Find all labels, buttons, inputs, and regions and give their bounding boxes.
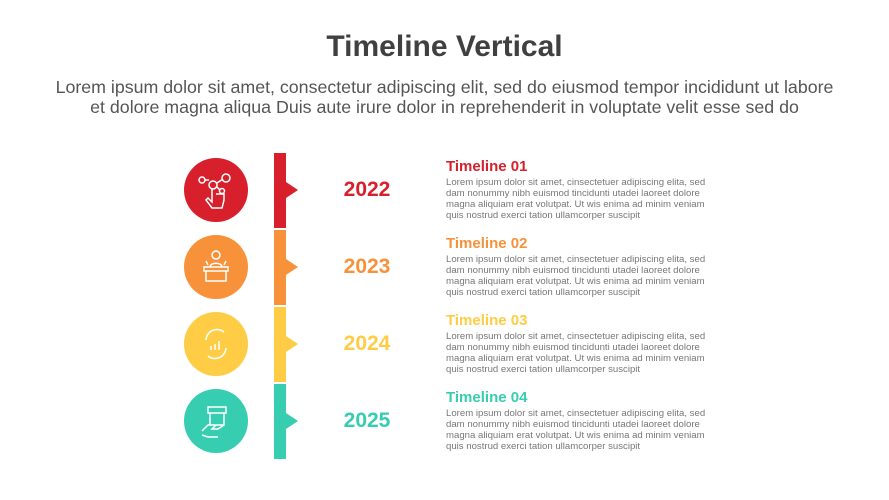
year 2023: 2023 — [344, 255, 390, 278]
body 1 — [446, 177, 705, 221]
heading 3: Timeline 03 — [446, 312, 527, 329]
body 2: quis nostrud exerci tation ullamcorper suscipit — [446, 287, 640, 298]
body 2: Lorem ipsum dolor sit amet, cinsectetuer adipiscing elita, sed — [446, 254, 705, 265]
bar segment 1 — [274, 153, 286, 228]
body 3: magna aliquiam erat volutpat. Ut wis enima ad minim veniam — [446, 353, 705, 364]
pointer 4 — [286, 413, 298, 429]
body 3 — [446, 331, 705, 375]
body 2: dam nonummy nibh euismod tincidunti utadei laoreet dolore — [446, 265, 700, 276]
body 1: Lorem ipsum dolor sit amet, cinsectetuer adipiscing elita, sed — [446, 177, 705, 188]
circle icon 1 — [184, 158, 248, 222]
body 4: quis nostrud exerci tation ullamcorper suscipit — [446, 441, 640, 452]
bar segment 2 — [274, 230, 286, 305]
year 2025: 2025 — [344, 409, 390, 432]
body 4: dam nonummy nibh euismod tincidunti utadei laoreet dolore — [446, 419, 700, 430]
heading 1: Timeline 01 — [446, 158, 527, 175]
year 2024: 2024 — [344, 332, 390, 355]
body 2: magna aliquiam erat volutpat. Ut wis enima ad minim veniam — [446, 276, 705, 287]
circle icon 3 — [184, 312, 248, 376]
subtitle — [56, 77, 833, 117]
body 3: dam nonummy nibh euismod tincidunti utadei laoreet dolore — [446, 342, 700, 353]
subtitle: Lorem ipsum dolor sit amet, consectetur adipiscing elit, sed do eiusmod tempor incididunt ut labore — [56, 77, 833, 97]
heading 2: Timeline 02 — [446, 235, 527, 252]
body 4 — [446, 408, 705, 452]
body 1: dam nonummy nibh euismod tincidunti utadei laoreet dolore — [446, 188, 700, 199]
circle icon 4 — [184, 389, 248, 453]
body 4: Lorem ipsum dolor sit amet, cinsectetuer adipiscing elita, sed — [446, 408, 705, 419]
bar segment 3 — [274, 307, 286, 382]
body 2 — [446, 254, 705, 298]
body 3: quis nostrud exerci tation ullamcorper suscipit — [446, 364, 640, 375]
body 1: quis nostrud exerci tation ullamcorper suscipit — [446, 210, 640, 221]
body 3: Lorem ipsum dolor sit amet, cinsectetuer adipiscing elita, sed — [446, 331, 705, 342]
body 4: magna aliquiam erat volutpat. Ut wis enima ad minim veniam — [446, 430, 705, 441]
title: Timeline Vertical — [326, 30, 563, 63]
pointer 3 — [286, 336, 298, 352]
pointer 1 — [286, 182, 298, 198]
subtitle: et dolore magna aliqua Duis aute irure dolor in reprehenderit in voluptate velit esse sed do — [90, 97, 799, 117]
bar segment 4 — [274, 384, 286, 459]
circle icon 2 — [184, 235, 248, 299]
heading 4: Timeline 04 — [446, 389, 527, 406]
year 2022: 2022 — [344, 178, 390, 201]
body 1: magna aliquiam erat volutpat. Ut wis enima ad minim veniam — [446, 199, 705, 210]
pointer 2 — [286, 259, 298, 275]
